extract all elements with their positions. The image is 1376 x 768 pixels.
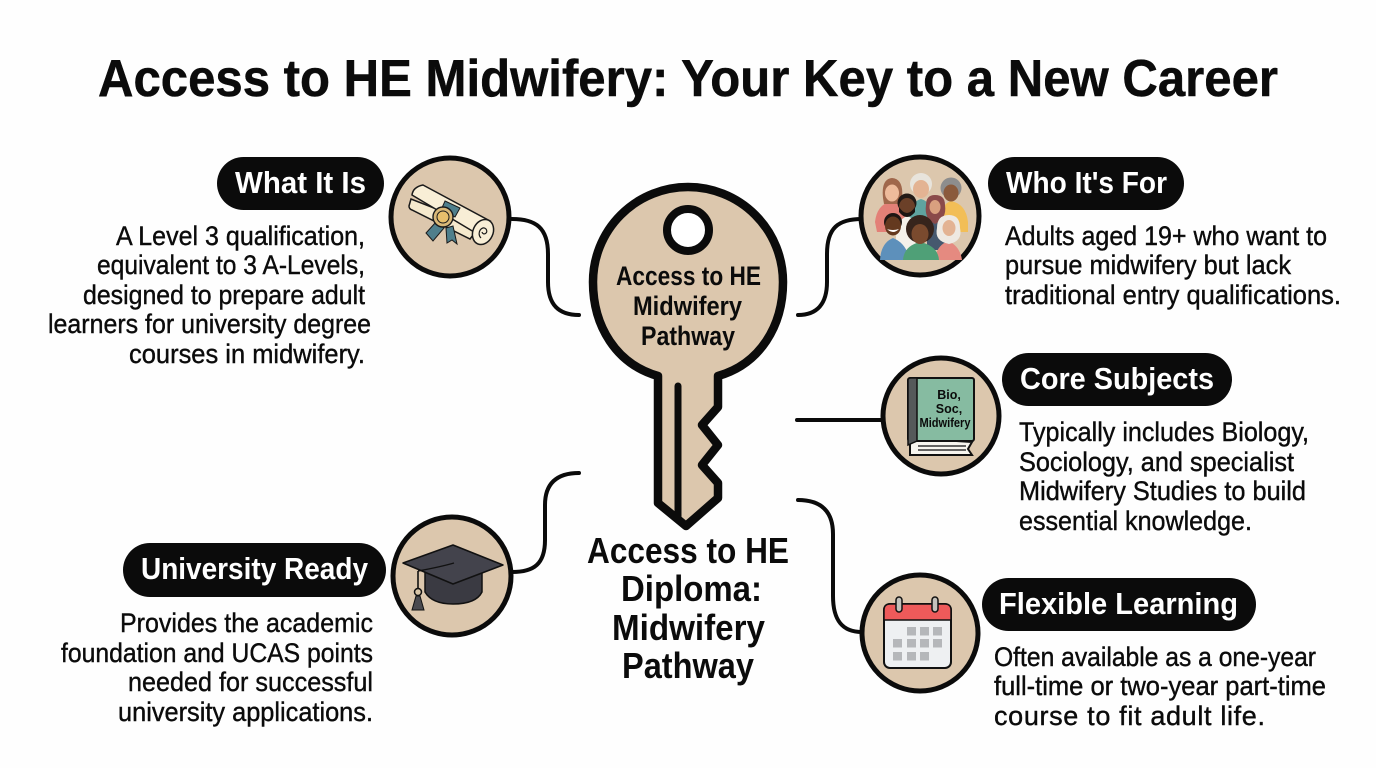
description: designed to prepare adult bbox=[83, 280, 365, 310]
description: needed for successful bbox=[128, 667, 373, 697]
title: Access to HE Midwifery: Your Key to a New Career bbox=[98, 50, 1278, 108]
diploma caption: Diploma: bbox=[621, 568, 762, 609]
connector: University Ready bbox=[512, 473, 579, 572]
panel: What It Is bbox=[48, 157, 509, 369]
description bbox=[1005, 221, 1341, 310]
description: foundation and UCAS points bbox=[61, 638, 373, 668]
panel: Core Subjects bbox=[883, 353, 1309, 536]
description: traditional entry qualifications. bbox=[1005, 280, 1341, 310]
description bbox=[48, 221, 371, 369]
description: A Level 3 qualification, bbox=[116, 221, 365, 251]
icon: textbook: Bio, bbox=[937, 388, 961, 402]
heading pill: University Ready bbox=[141, 551, 369, 586]
heading pill: Who It's For bbox=[1006, 165, 1167, 200]
description: Typically includes Biology, bbox=[1019, 417, 1309, 447]
description: Often available as a one-year bbox=[994, 642, 1316, 672]
heading pill bbox=[217, 157, 384, 210]
description: pursue midwifery but lack bbox=[1005, 250, 1291, 280]
key label: Midwifery bbox=[633, 291, 742, 321]
panel: Flexible Learning bbox=[862, 575, 1326, 731]
key body bbox=[593, 187, 783, 526]
key blade groove bbox=[674, 386, 682, 520]
heading pill bbox=[988, 157, 1184, 210]
description: essential knowledge. bbox=[1019, 506, 1252, 536]
icon: textbook bbox=[883, 358, 999, 474]
icon: group of people bbox=[861, 157, 979, 275]
heading pill: Core Subjects bbox=[1020, 361, 1214, 396]
description: course to fit adult life. bbox=[994, 701, 1265, 731]
diploma caption: Midwifery bbox=[612, 607, 765, 648]
description bbox=[994, 642, 1326, 731]
connector: What It Is bbox=[512, 219, 579, 315]
heading pill: What It Is bbox=[235, 165, 366, 200]
heading pill: Flexible Learning bbox=[999, 586, 1238, 621]
heading pill bbox=[123, 543, 386, 597]
panel: University Ready bbox=[61, 517, 511, 727]
description: Adults aged 19+ who want to bbox=[1005, 221, 1327, 251]
description: learners for university degree bbox=[48, 309, 371, 339]
description: full-time or two-year part-time bbox=[994, 671, 1326, 701]
connector: Who It's For bbox=[798, 219, 862, 315]
description: Provides the academic bbox=[120, 608, 373, 638]
description: courses in midwifery. bbox=[129, 339, 365, 369]
connector: Flexible Learning bbox=[798, 500, 862, 632]
key hole bbox=[667, 209, 709, 251]
diploma caption bbox=[587, 530, 789, 686]
description: Sociology, and specialist bbox=[1019, 447, 1294, 477]
central key illustration bbox=[593, 187, 783, 526]
key label bbox=[616, 261, 761, 351]
icon: graduation cap bbox=[393, 517, 511, 635]
icon: textbook: Soc, bbox=[936, 402, 962, 416]
icon: calendar bbox=[862, 575, 978, 691]
icon: diploma scroll bbox=[391, 158, 509, 276]
heading pill bbox=[982, 578, 1256, 631]
description bbox=[61, 608, 373, 727]
diploma caption: Access to HE bbox=[587, 530, 789, 571]
heading pill bbox=[1002, 353, 1232, 406]
description: university applications. bbox=[118, 697, 373, 727]
key label: Pathway bbox=[641, 321, 735, 351]
key label: Access to HE bbox=[616, 261, 761, 291]
panel: Who It's For bbox=[861, 157, 1341, 310]
diploma caption: Pathway bbox=[622, 645, 754, 686]
description: Midwifery Studies to build bbox=[1019, 476, 1306, 506]
description bbox=[1019, 417, 1309, 536]
description: equivalent to 3 A-Levels, bbox=[97, 250, 365, 280]
icon: textbook: Midwifery bbox=[920, 416, 971, 430]
connector: Core Subjects bbox=[797, 418, 884, 422]
